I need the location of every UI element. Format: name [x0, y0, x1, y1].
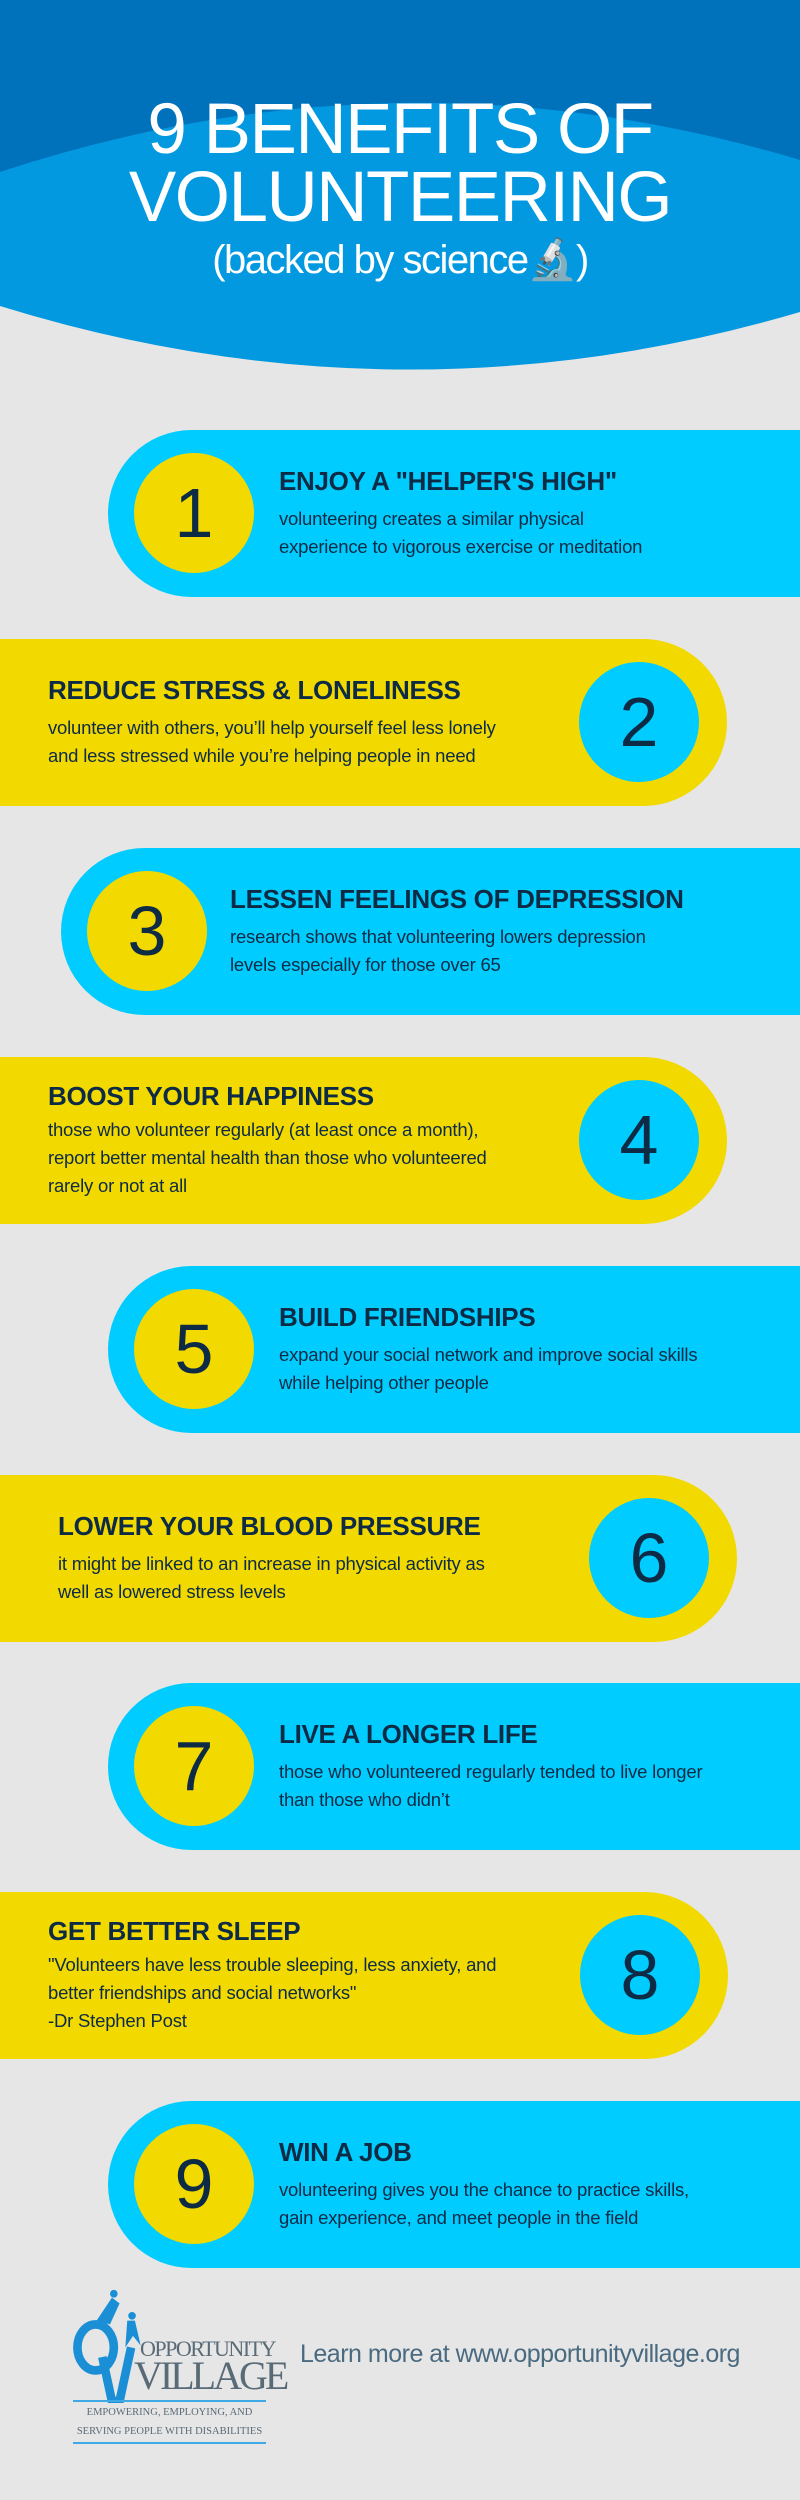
panel: 1: volunteering creates a similar physical: [279, 508, 584, 529]
logo: EMPOWERING, EMPLOYING, AND: [87, 2407, 252, 2418]
icon: QV figures: [73, 2290, 141, 2403]
panel: 1: ENJOY A "HELPER'S HIGH": [279, 466, 617, 496]
panel: 3: levels especially for those over 65: [230, 954, 501, 975]
panel: 4: report better mental health than those who volunteered: [48, 1147, 487, 1168]
panel: 9: gain experience, and meet people in the field: [279, 2207, 638, 2228]
panel: 3: [61, 848, 800, 1015]
panel: 4: [0, 1057, 727, 1224]
panel: 4: rarely or not at all: [48, 1175, 187, 1196]
panel: 7: those who volunteered regularly tended to live longer: [279, 1761, 702, 1782]
panel: 6: well as lowered stress levels: [58, 1581, 286, 1602]
panel: 9: [108, 2101, 800, 2268]
panel: 2: REDUCE STRESS & LONELINESS: [48, 675, 461, 705]
panel: 3: research shows that volunteering lowers depression: [230, 926, 646, 947]
panel: 9: 9: [175, 2145, 213, 2223]
panel: 1: experience to vigorous exercise or meditation: [279, 536, 642, 557]
panel: 2: and less stressed while you’re helping people in need: [48, 745, 476, 766]
panel: 7: 7: [175, 1727, 213, 1805]
panel: 4: those who volunteer regularly (at least once a month),: [48, 1119, 478, 1140]
panel: 5: BUILD FRIENDSHIPS: [279, 1302, 535, 1332]
panel: 6: it might be linked to an increase in physical activity as: [58, 1553, 485, 1574]
panel: 2: [0, 639, 727, 806]
footer link text: Learn more at www.opportunityvillage.org: [300, 2340, 740, 2368]
panel: 7: than those who didn’t: [279, 1789, 450, 1810]
panel: 4: BOOST YOUR HAPPINESS: [48, 1081, 374, 1111]
subtitle: (backed by science🔬): [212, 238, 588, 282]
panel: 1: [108, 430, 800, 597]
panel: 5: [108, 1266, 800, 1433]
panel: 5: 5: [175, 1310, 213, 1388]
panel: 6: 6: [630, 1519, 668, 1597]
panel: 2: 2: [620, 683, 658, 761]
panel: 5: expand your social network and improve social skills: [279, 1344, 697, 1365]
panel: 1: 1: [175, 474, 213, 552]
panel: 8: [0, 1892, 728, 2059]
title: [129, 90, 671, 237]
panel: 6: [0, 1475, 737, 1642]
panel: 9: volunteering gives you the chance to practice skills,: [279, 2179, 689, 2200]
panel: 3: 3: [128, 892, 166, 970]
panel: 4: 4: [620, 1101, 658, 1179]
logo: VILLAGE: [134, 2353, 286, 2398]
panel: 5: while helping other people: [279, 1372, 489, 1393]
logo: SERVING PEOPLE WITH DISABILITIES: [77, 2426, 262, 2437]
panel: 8: 8: [621, 1936, 659, 2014]
panel: 8: better friendships and social networks": [48, 1982, 356, 2003]
title: VOLUNTEERING: [129, 158, 671, 237]
logo text: OPPORTUNITY: [140, 2336, 275, 2361]
title: 9 BENEFITS OF: [147, 90, 653, 169]
panel: 2: volunteer with others, you’ll help yourself feel less lonely: [48, 717, 496, 738]
panel: 7: [108, 1683, 800, 1850]
panel: 3: LESSEN FEELINGS OF DEPRESSION: [230, 884, 684, 914]
panel: 8: -Dr Stephen Post: [48, 2010, 187, 2031]
panel: 9: WIN A JOB: [279, 2137, 412, 2167]
logo: [73, 2290, 288, 2444]
panel: 7: LIVE A LONGER LIFE: [279, 1719, 537, 1749]
panel: 8: "Volunteers have less trouble sleeping, less anxiety, and: [48, 1954, 496, 1975]
header background: [0, 0, 800, 370]
panel: 8: GET BETTER SLEEP: [48, 1916, 300, 1946]
panel: 6: LOWER YOUR BLOOD PRESSURE: [58, 1511, 481, 1541]
